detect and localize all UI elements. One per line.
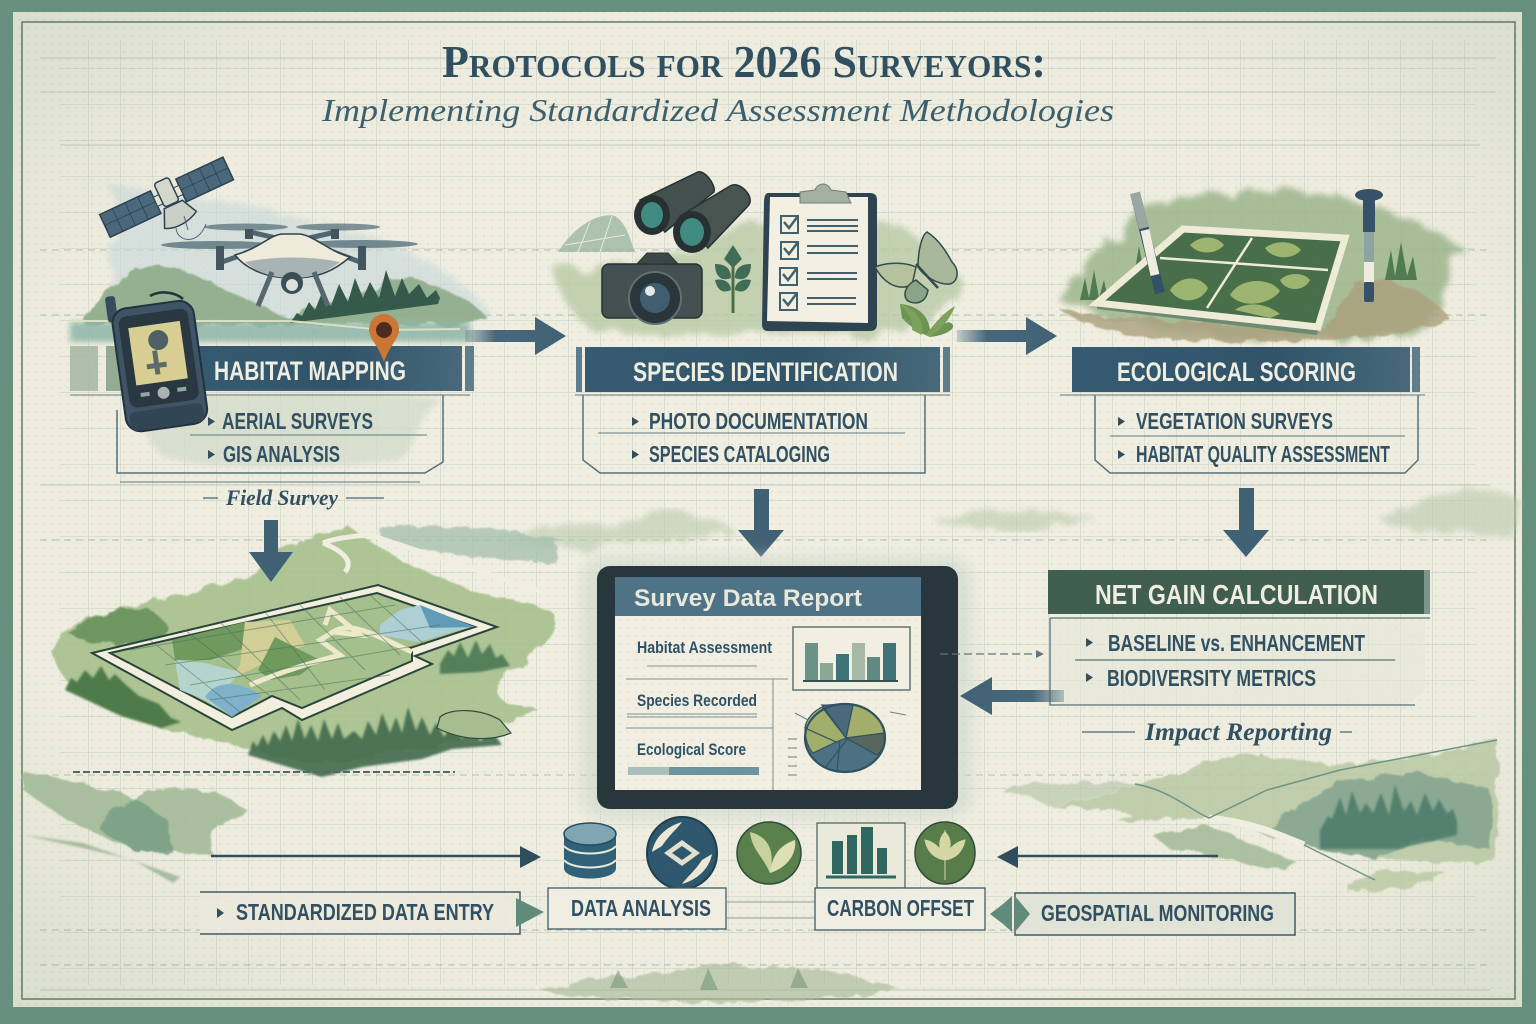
panel: ecological scoring illustration — [1058, 189, 1465, 341]
title: Protocols for 2026 Surveyors: — [442, 37, 1046, 87]
box: geospatial monitoring — [990, 893, 1295, 935]
text block: ecological list: VEGETATION SURVEYS — [1136, 408, 1333, 434]
icon: clipboard checklist — [762, 184, 877, 331]
panel: tablet survey data report — [582, 556, 972, 818]
map illustration — [50, 527, 558, 777]
text block: habitat mapping list — [70, 394, 470, 482]
panel: net gain calculation — [1048, 570, 1430, 705]
box: standardized data entry: STANDARDIZED DATA ENTRY — [236, 899, 494, 925]
tablet pie chart — [805, 704, 885, 772]
arrow: net gain to tablet — [960, 677, 1064, 715]
tablet bar chart — [793, 627, 910, 690]
icon: binoculars — [634, 172, 750, 253]
header: ecological scoring — [1072, 347, 1420, 392]
text block: net gain list — [1050, 618, 1430, 705]
text block: habitat mapping list: GIS ANALYSIS — [223, 441, 340, 467]
header: species identification: SPECIES IDENTIFICATION — [633, 357, 898, 387]
text block: habitat mapping list: AERIAL SURVEYS — [222, 408, 373, 434]
text block: species list — [575, 395, 950, 473]
box: carbon offset — [815, 888, 985, 930]
label: field survey: Field Survey — [225, 485, 338, 510]
text block: species list: SPECIES CATALOGING — [649, 441, 830, 467]
icon: drone — [161, 224, 418, 306]
icon: location pin — [369, 314, 399, 362]
box: standardized data entry — [200, 892, 544, 934]
icon: leaf wash — [558, 215, 635, 252]
arrow: species to ecological — [957, 317, 1057, 355]
icon: database — [564, 823, 616, 878]
text block: species list: PHOTO DOCUMENTATION — [649, 408, 868, 434]
terrain around the map — [50, 527, 558, 777]
tablet metric list: Species Recorded — [637, 691, 757, 710]
header: ecological scoring: ECOLOGICAL SCORING — [1117, 357, 1356, 387]
icon: camera — [602, 253, 702, 324]
box: data analysis — [548, 888, 726, 929]
icon: satellite — [98, 153, 241, 254]
arrow: field survey to map — [249, 520, 293, 582]
connector: net gain to tablet — [940, 650, 1044, 658]
icon: analysis cycle — [647, 817, 717, 889]
arrow: monitoring to icons — [997, 846, 1218, 868]
header: species identification — [576, 347, 950, 392]
header: habitat mapping: HABITAT MAPPING — [214, 356, 406, 386]
header: net gain: NET GAIN CALCULATION — [1095, 579, 1378, 610]
arrow: ecological to net gain — [1223, 488, 1269, 557]
tablet header — [615, 577, 921, 616]
header: habitat mapping — [70, 346, 474, 391]
watercolor terrain washes — [23, 490, 1515, 1002]
text block: ecological list: HABITAT QUALITY ASSESSMENT — [1136, 441, 1390, 467]
icon: vegetation quadrat — [1097, 229, 1345, 335]
map sheet — [92, 585, 497, 730]
icon: leaf badge — [737, 822, 801, 884]
icon: bar chart — [817, 823, 905, 888]
arrow: habitat to species — [465, 317, 566, 355]
icon: GPS handheld — [105, 285, 209, 434]
tablet header: Survey Data Report — [634, 585, 862, 612]
box: geospatial monitoring: GEOSPATIAL MONITORING — [1041, 900, 1274, 926]
text block: net gain list: BIODIVERSITY METRICS — [1107, 665, 1316, 691]
tablet metric list: Habitat Assessment — [637, 638, 772, 657]
panel: habitat mapping illustration — [70, 153, 490, 342]
label: impact reporting: Impact Reporting — [1144, 719, 1332, 746]
text block: ecological list — [1060, 395, 1425, 473]
icon: plant badge — [915, 822, 975, 884]
icon: hills and forest — [70, 265, 485, 342]
icon: sprig — [715, 245, 751, 313]
icon: butterfly — [875, 232, 957, 303]
arrow: species to report — [738, 489, 784, 557]
icon: measuring pole — [1135, 193, 1160, 293]
panel: species identification illustration — [553, 172, 960, 337]
box: carbon offset: CARBON OFFSET — [827, 895, 974, 921]
icon: grass tuft — [900, 304, 955, 337]
bottom icon row — [564, 817, 975, 889]
tablet metric list: Ecological Score — [637, 740, 746, 759]
arrow: data entry to icons — [211, 846, 541, 868]
tablet metric list — [626, 638, 788, 790]
box: data analysis: DATA ANALYSIS — [571, 895, 711, 921]
subtitle: Implementing Standardized Assessment Methodologies — [321, 92, 1114, 128]
header: net gain — [1048, 570, 1430, 614]
text block: net gain list: BASELINE vs. ENHANCEMENT — [1108, 630, 1365, 656]
icon: survey post — [1355, 189, 1383, 302]
